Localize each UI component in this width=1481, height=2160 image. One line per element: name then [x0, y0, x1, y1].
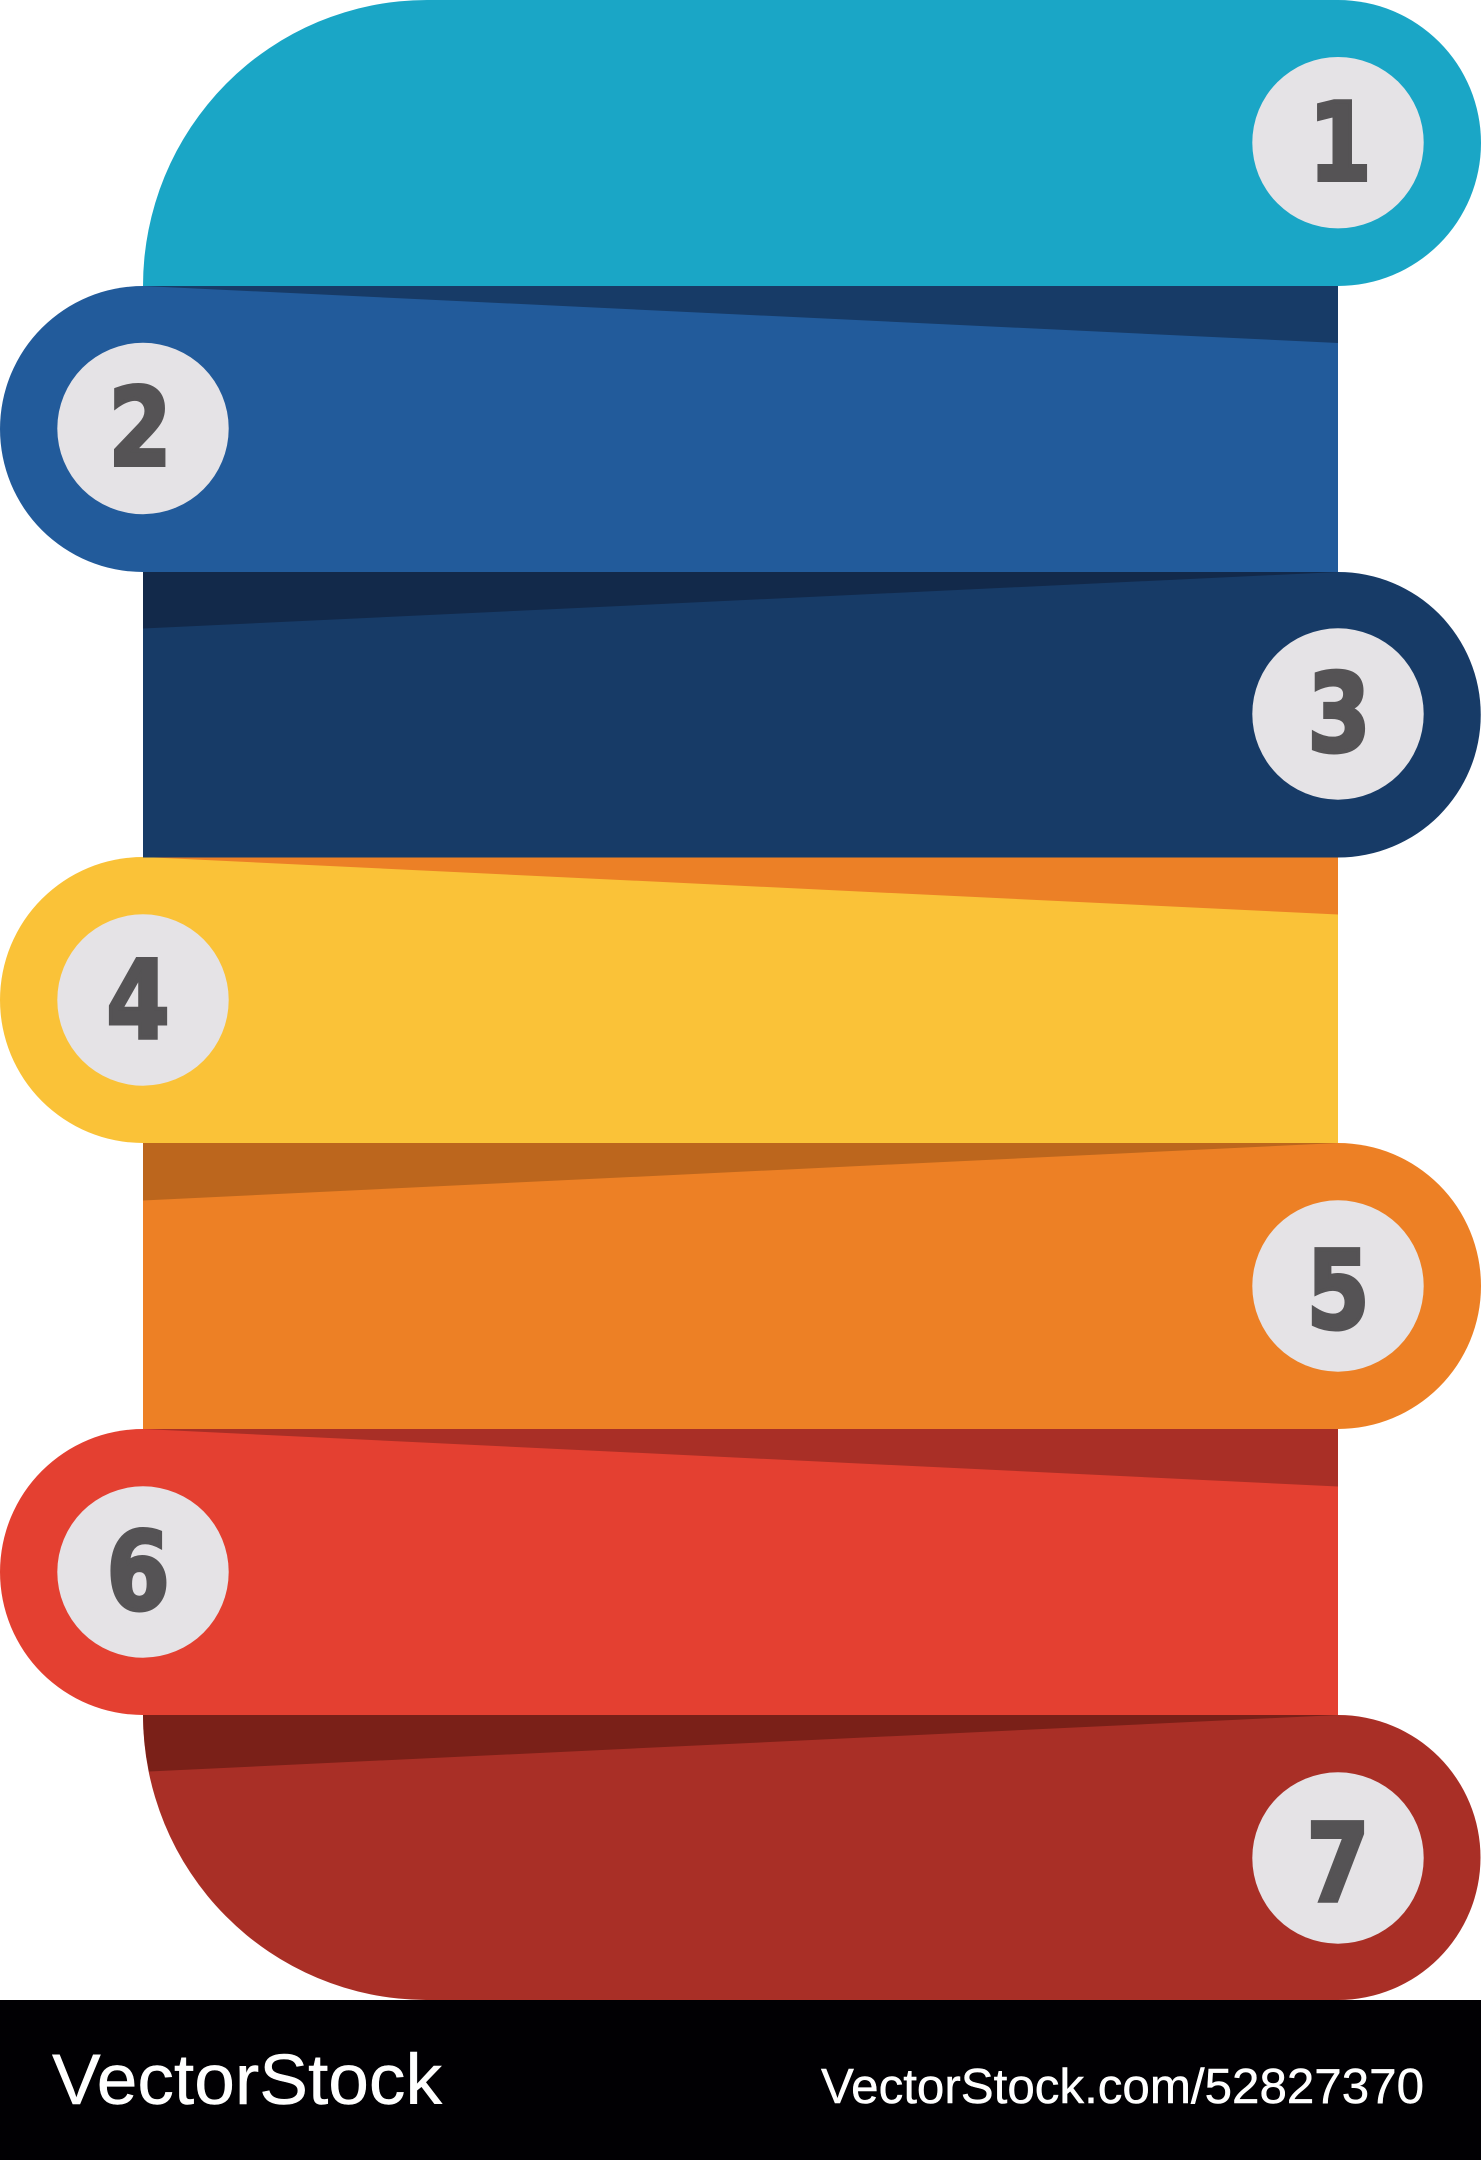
badge 6: 6: [106, 1508, 170, 1635]
footer logo wordmark: VectorStock: [52, 2041, 443, 2120]
badge 5: 5: [1306, 1227, 1370, 1354]
band 5 fold shadow: [143, 1143, 1338, 1200]
band 7 fold shadow: [143, 1715, 1338, 1772]
badge 6: [57, 1486, 229, 1658]
badge 1: [1252, 57, 1424, 228]
band 7: [143, 1715, 1480, 2000]
footer bar: [0, 2000, 1481, 2160]
band 2: [0, 286, 1338, 572]
band 2 fold shadow: [143, 286, 1338, 343]
band 6: [0, 1429, 1338, 1715]
band 5: [143, 1143, 1481, 1429]
badge 7: 7: [1306, 1800, 1370, 1927]
badge 3: 3: [1307, 650, 1371, 777]
band 6 fold shadow: [143, 1429, 1338, 1486]
footer image url: VectorStock.com/52827370: [821, 2060, 1424, 2114]
badge 7: [1252, 1772, 1424, 1944]
band 1: [143, 0, 1481, 286]
band 3 fold shadow: [143, 572, 1338, 628]
badge 4: [57, 914, 229, 1086]
badge 4: 4: [106, 937, 170, 1064]
badge 2: [57, 343, 229, 514]
band 4: [0, 857, 1338, 1143]
badge 5: [1252, 1200, 1424, 1372]
badge 1: 1: [1308, 79, 1372, 206]
band 4 fold shadow: [143, 857, 1338, 914]
badge 3: [1252, 628, 1424, 800]
band 3: [143, 572, 1481, 858]
badge 2: 2: [108, 364, 172, 491]
